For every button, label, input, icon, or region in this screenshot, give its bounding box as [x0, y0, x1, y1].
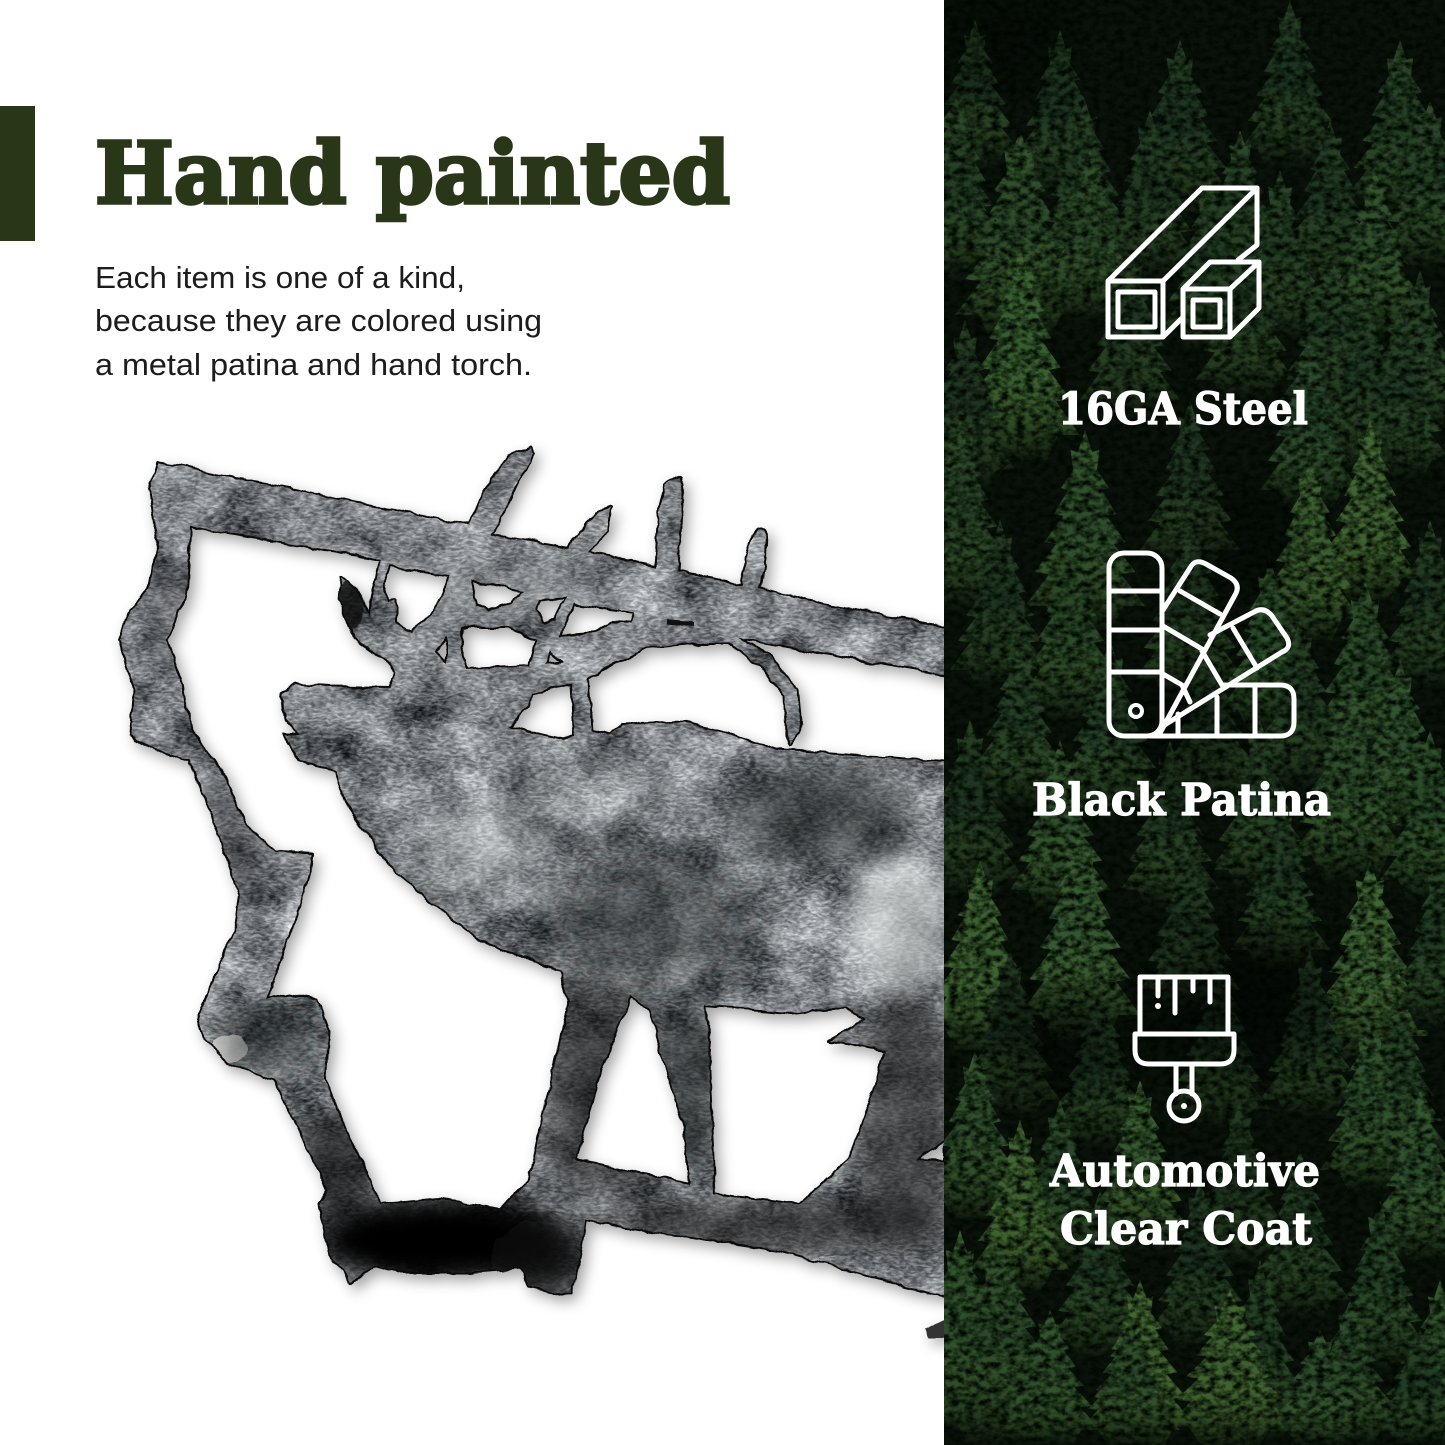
label: Black Patina: Black Patina [1032, 775, 1331, 826]
description text: because they are colored using [95, 303, 542, 338]
tree layer [900, 0, 1445, 1445]
label: Automotive Clear Coat: Automotive [1049, 1146, 1320, 1197]
label: Automotive Clear Coat: Clear Coat [1060, 1204, 1313, 1255]
metal elk in Montana outline [110, 440, 960, 1338]
label: Automotive Clear Coat [1049, 1146, 1320, 1255]
label: 16GA Steel: 16GA Steel [1058, 384, 1308, 435]
icon: paint brush [1135, 977, 1234, 1121]
accent bar [0, 106, 35, 241]
icon: steel tubes [1108, 188, 1259, 337]
icon: colour swatches [1109, 553, 1294, 736]
description text [95, 260, 542, 382]
description text: Each item is one of a kind, [95, 260, 465, 295]
description text: a metal patina and hand torch. [95, 347, 532, 382]
panel: forest photo [900, 0, 1445, 1445]
title: Hand painted [95, 124, 730, 224]
